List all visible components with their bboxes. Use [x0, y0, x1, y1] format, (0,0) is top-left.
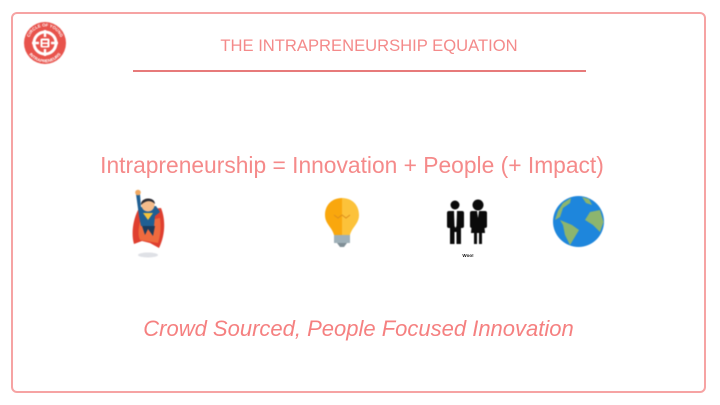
- icon: man and woman: [446, 198, 488, 245]
- title underline: [133, 70, 586, 72]
- title: THE INTRAPRENEURSHIP EQUATION: [220, 36, 518, 55]
- icon: globe: [552, 195, 605, 248]
- logo: Circle of Young Intrapreneurs: INTRAPRENEURS: [28, 52, 62, 64]
- icon label: Woo!: [462, 253, 474, 258]
- equation: Intrapreneurship = Innovation + People (+ Impact): [100, 152, 604, 178]
- icon: superhero: [132, 189, 165, 258]
- logo: Circle of Young Intrapreneurs: [23, 21, 67, 65]
- tagline: Crowd Sourced, People Focused Innovation: [143, 316, 574, 341]
- icon: light bulb: [324, 197, 360, 248]
- logo: Circle of Young Intrapreneurs: CIRCLE OF YOUNG: [26, 22, 64, 38]
